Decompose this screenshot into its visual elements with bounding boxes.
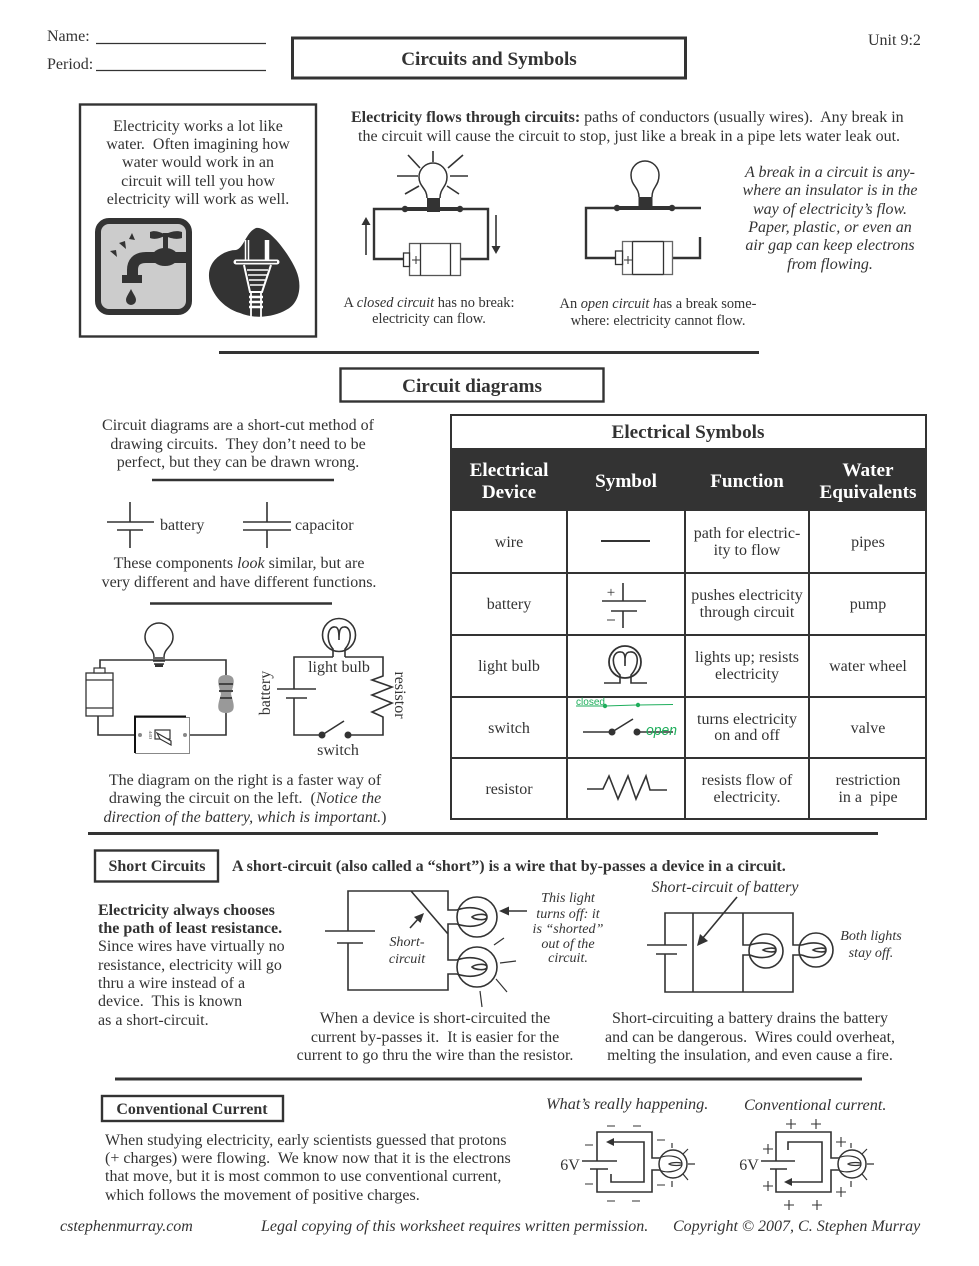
intro text: Electricity works a lot like — [113, 118, 283, 135]
diagram: electron flow: 6V — [560, 1157, 580, 1174]
diagram: electron flow: What’s really happening. — [546, 1094, 708, 1113]
table header row: Function — [710, 471, 784, 492]
row: resistor: in a pipe — [838, 789, 898, 806]
text: a break in a circuit: where an insulator is in the — [743, 182, 917, 199]
arrow: current up — [365, 225, 367, 255]
row: resistor: resistor — [485, 781, 533, 798]
heading: circuit diagrams: Circuit diagrams — [402, 376, 542, 397]
row: battery: battery — [487, 596, 531, 613]
icon: resistor — [218, 675, 234, 713]
table header row: Equivalents — [819, 482, 917, 503]
diagram: closed circuit — [362, 151, 500, 276]
row: switch: on and off — [714, 727, 780, 744]
row: battery: pushes electricity — [691, 587, 803, 604]
diagram: short-circuit of battery: Short-circuit of battery — [652, 879, 799, 896]
text: a break in a circuit: air gap can keep electrons — [745, 237, 915, 254]
panel: electricity like water — [80, 104, 316, 336]
diagram: schematic circuit: resistor — [391, 671, 408, 719]
text: path of least resistance: thru a wire instead of a — [98, 975, 245, 992]
intro text: circuit will tell you how — [121, 173, 275, 190]
diagram: short-circuited bulb: circuit — [389, 951, 426, 967]
caption: closed circuit: electricity can flow. — [372, 311, 486, 327]
text: circuit diagrams intro: Circuit diagrams are a short-cut method of — [102, 417, 375, 434]
table header row — [450, 448, 927, 511]
row: light bulb: electricity — [715, 666, 779, 683]
icon: water faucet — [98, 221, 189, 312]
text: path of least resistance: Electricity always chooses — [98, 902, 275, 919]
text: electricity flows through circuits: the circuit will cause the circuit to stop, just like a break in a pipe lets water leak out. — [358, 128, 900, 145]
heading: conventional current: Conventional Current — [116, 1101, 268, 1118]
icon: battery — [622, 242, 672, 274]
caption: diagram comparison: The diagram on the right is a faster way of — [109, 772, 382, 789]
caption: short-circuited device: When a device is short-circuited the — [320, 1010, 550, 1027]
diagram: schematic circuit: light bulb — [308, 659, 370, 676]
icon: wall switch: OFF — [148, 730, 153, 739]
icon: wall switch — [135, 716, 190, 754]
icon: bulb two — [799, 933, 833, 967]
diagram: conventional current — [739, 1096, 886, 1210]
row: battery: pump — [850, 596, 886, 613]
icon: battery — [86, 673, 113, 716]
diagram: schematic circuit — [257, 618, 408, 759]
row: wire: pipes — [851, 534, 885, 551]
caption: short-circuited device: current by-passes it. It is easier for the — [311, 1029, 559, 1046]
arrow: battery short — [702, 897, 737, 939]
table title: Electrical Symbols — [612, 422, 764, 443]
icon: lit bulb — [457, 938, 516, 1007]
caption: closed circuit: A closed circuit has no break: — [344, 295, 514, 311]
row: wire: wire — [495, 534, 523, 551]
text: path of least resistance: device. This is known — [98, 993, 242, 1010]
diagram: short-circuited bulb — [325, 890, 604, 1007]
table header row: Device — [482, 482, 537, 503]
diagram: schematic circuit: switch — [317, 742, 359, 759]
row: resistor: resists flow of — [702, 772, 792, 789]
row: resistor — [485, 772, 900, 806]
title — [292, 38, 686, 78]
text: short-circuit definition: A short-circuit (also called a “short”) is a wire that by-passes a device in a circuit. — [232, 858, 786, 875]
diagram: short-circuited bulb: circuit. — [548, 950, 588, 966]
diagram: short-circuit of battery: Both lights — [840, 928, 902, 944]
arrow: to shorted bulb — [508, 910, 527, 912]
row: wire — [495, 525, 885, 559]
icon: bulb — [659, 1143, 695, 1187]
name and period fields — [47, 28, 266, 73]
row: battery: + — [607, 585, 615, 601]
text: conventional current: (+ charges) were flowing. We know now that it is the electrons — [105, 1150, 511, 1167]
caption: open circuit: An open circuit has a break some- — [560, 296, 756, 312]
row: wire: ity to flow — [714, 542, 781, 559]
row: light bulb — [478, 646, 907, 683]
handwritten annotation: closed — [576, 697, 605, 708]
heading: conventional current — [102, 1096, 283, 1121]
icon: battery — [410, 244, 460, 276]
table: electrical symbols — [450, 415, 927, 819]
table header row: Symbol — [595, 471, 657, 492]
diagram: short-circuited bulb: out of the — [541, 936, 595, 952]
footer: cstephenmurray.com — [60, 1218, 193, 1235]
text: path of least resistance: resistance, electricity will go — [98, 957, 282, 974]
footer — [60, 1218, 921, 1235]
icon: bulb — [838, 1143, 874, 1187]
text: a break in a circuit: Paper, plastic, or even an — [747, 219, 912, 236]
arrow: to short-circuit — [410, 918, 419, 928]
row: battery: through circuit — [700, 604, 795, 621]
diagram: short-circuited bulb: This light — [541, 890, 595, 906]
diagram: short-circuited bulb: is “shorted” — [533, 921, 604, 937]
diagram: short-circuited bulb: Short- — [389, 934, 425, 950]
diagram: short-circuit of battery: stay off. — [849, 945, 893, 961]
electron charges — [585, 1126, 665, 1201]
row: resistor: electricity. — [714, 789, 780, 806]
diagram: conventional current: Conventional current. — [744, 1096, 886, 1114]
handwritten annotation — [576, 697, 677, 739]
row: resistor: restriction — [836, 772, 900, 789]
row: switch: turns electricity — [697, 711, 797, 728]
table header row: Water — [842, 460, 894, 481]
row: light bulb: lights up; resists — [695, 649, 799, 666]
text: electricity flows through circuits: Electricity flows through circuits: paths of conductors (usually wires). Any break in — [351, 109, 904, 126]
text: circuit diagrams intro: drawing circuits. They don’t need to be — [110, 436, 366, 453]
text: components look similar: These components look similar, but are — [114, 555, 364, 572]
text: circuit diagrams intro: perfect, but they can be drawn wrong. — [117, 454, 359, 471]
intro text: electricity will work as well. — [107, 191, 289, 208]
arrow: current down — [495, 215, 497, 246]
row: light bulb: water wheel — [829, 658, 907, 675]
diagram: open circuit — [586, 161, 701, 274]
footer: Copyright © 2007, C. Stephen Murray — [673, 1218, 921, 1235]
text: path of least resistance: as a short-circuit. — [98, 1012, 209, 1029]
text: path of least resistance: Since wires have virtually no — [98, 938, 285, 955]
intro text: water. Often imagining how — [106, 136, 290, 153]
text: conventional current: When studying electricity, early scientists guessed that protons — [105, 1132, 507, 1149]
row: light bulb: light bulb — [478, 658, 540, 675]
handwritten annotation: open — [646, 722, 677, 739]
text: a break in a circuit: from flowing. — [787, 256, 873, 273]
icon: bulb one — [749, 934, 783, 968]
symbol: capacitor: capacitor — [295, 517, 354, 534]
row: battery — [487, 583, 886, 628]
caption: battery short: Short-circuiting a battery drains the battery — [612, 1010, 888, 1027]
footer: Legal copying of this worksheet requires written permission. — [260, 1218, 648, 1235]
diagram: electron flow — [546, 1094, 708, 1201]
caption: short-circuited device: current to go thru the wire than the resistor. — [297, 1047, 573, 1064]
diagram: pictorial circuit — [86, 623, 234, 754]
caption: battery short: and can be dangerous. Wires could overheat, — [605, 1029, 895, 1046]
caption: diagram comparison: drawing the circuit on the left. (Notice the — [109, 790, 381, 807]
intro text: water would work in an — [122, 154, 274, 171]
symbol: capacitor — [243, 502, 354, 548]
table header row: Electrical — [470, 460, 548, 481]
text: a break in a circuit: A break in a circuit is any- — [744, 164, 915, 181]
heading: short circuits: Short Circuits — [108, 858, 206, 875]
diagram: conventional current: 6V — [739, 1157, 759, 1174]
row: switch: valve — [851, 720, 885, 737]
diagram: short-circuit of battery — [647, 879, 902, 992]
unit label: Unit 9:2 — [868, 32, 921, 49]
name and period fields: Period: — [47, 56, 93, 73]
caption: diagram comparison: direction of the battery, which is important.) — [104, 809, 386, 826]
row: switch: switch — [488, 720, 530, 737]
icon: electric plug — [209, 228, 299, 317]
symbol: battery: battery — [160, 517, 204, 534]
caption: battery short: melting the insulation, and even cause a fire. — [607, 1047, 893, 1064]
heading: circuit diagrams — [340, 368, 604, 402]
row: wire: path for electric- — [694, 525, 800, 542]
caption: open circuit: where: electricity cannot flow. — [571, 313, 745, 329]
text: conventional current: that move, but it is most common to use conventional current, — [105, 1168, 501, 1185]
text: conventional current: which follows the movement of positive charges. — [105, 1187, 420, 1204]
name and period fields: Name: — [47, 28, 90, 45]
diagram: short-circuited bulb: turns off: it — [536, 906, 601, 922]
diagram: schematic circuit: battery — [257, 671, 274, 715]
row: switch — [488, 697, 885, 744]
symbol: battery — [107, 502, 204, 548]
text: components look similar: very different and have different functions. — [102, 574, 376, 591]
heading: short circuits — [95, 850, 218, 882]
positive charges — [763, 1119, 846, 1210]
title: Circuits and Symbols — [401, 49, 577, 70]
icon: bulb rays — [397, 151, 468, 194]
text: path of least resistance: the path of least resistance. — [98, 920, 282, 937]
icon: shorted bulb — [457, 897, 497, 937]
text: a break in a circuit: way of electricity’s flow. — [753, 201, 907, 218]
